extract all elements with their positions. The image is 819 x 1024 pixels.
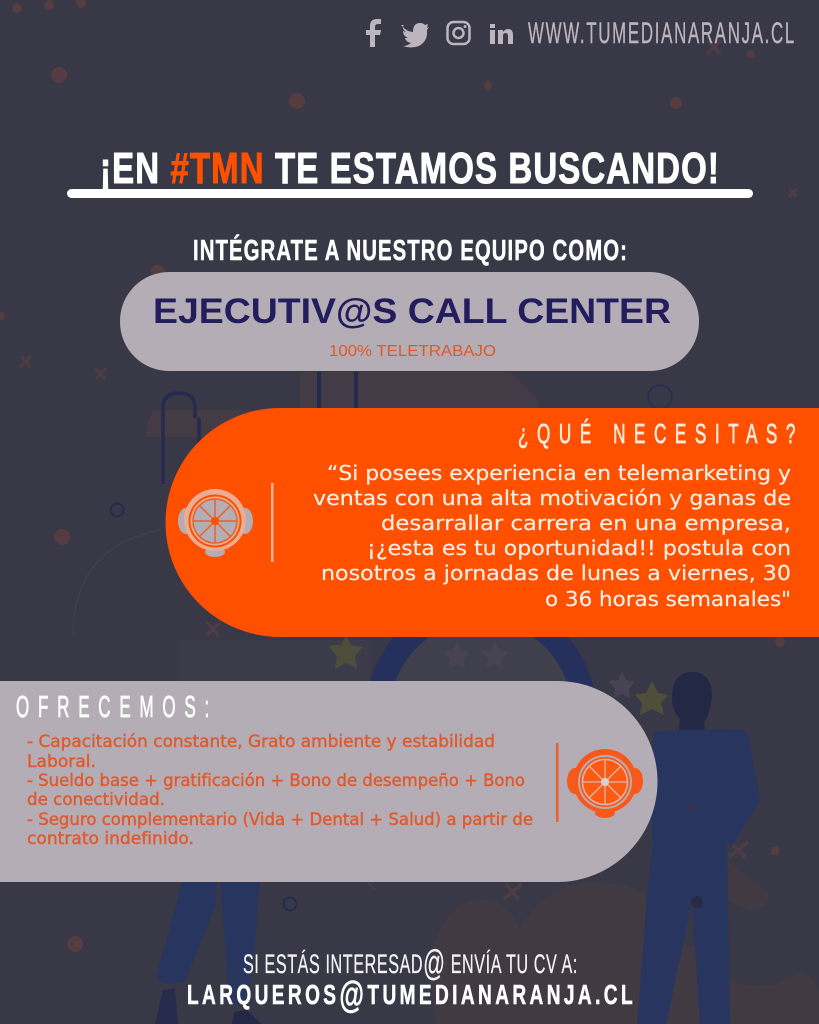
background clock and stars	[180, 609, 668, 815]
icon: linkedin	[490, 24, 513, 44]
social icons	[366, 19, 513, 48]
logo: orange with headset	[567, 749, 643, 818]
body text: ¡¿esta es tu oportunidad!! postula con	[367, 536, 791, 560]
icon: instagram	[448, 22, 470, 44]
body text: desarrallar carrera en una empresa,	[381, 511, 791, 535]
call to action: ENVÍA TU CV A:	[446, 949, 578, 979]
body text	[313, 461, 791, 611]
divider	[556, 743, 558, 822]
benefits list	[27, 732, 533, 848]
benefits list: - Seguro complementario (Vida + Dental + Salud) a partir de	[27, 810, 533, 829]
panel: qué necesitas	[166, 408, 819, 637]
heading: OFRECEMOS:	[16, 689, 218, 724]
job modality: 100% TELETRABAJO	[329, 343, 496, 360]
man spots	[687, 805, 695, 813]
call to action: SI ESTÁS INTERESAD	[243, 949, 545, 979]
subtitle: INTÉGRATE A NUESTRO EQUIPO COMO:	[193, 233, 628, 267]
body text: nosotros a jornadas de lunes a viernes, 30	[321, 561, 791, 585]
background desk and clip	[73, 372, 672, 910]
background woman	[155, 882, 262, 1024]
icon: facebook	[366, 19, 381, 47]
background blobs	[431, 860, 819, 1024]
benefits list: contrato indefinido.	[27, 829, 194, 848]
benefits list: - Capacitación constante, Grato ambiente y estabilidad	[27, 732, 495, 751]
panel: ofrecemos	[0, 681, 658, 882]
contact email: TUMEDIANARANJA.CL	[367, 979, 636, 1010]
body text: o 36 horas semanales"	[545, 587, 791, 611]
call to action: @	[423, 942, 446, 983]
benefits list: - Sueldo base + gratificación + Bono de desempeño + Bono	[27, 771, 525, 790]
background man	[637, 672, 760, 1024]
title underline	[67, 189, 753, 198]
body text: ventas con una alta motivación y ganas de	[313, 486, 791, 510]
background crosses	[20, 40, 797, 899]
divider	[271, 483, 274, 562]
benefits list: de conectividad.	[27, 790, 165, 809]
contact email: @	[339, 974, 367, 1015]
body text: “Si posees experiencia en telemarketing y	[327, 461, 791, 485]
logo: orange with headset	[178, 489, 253, 557]
icon: twitter	[401, 23, 429, 48]
job title: EJECUTIV@S CALL CENTER	[153, 292, 671, 331]
panel: job title	[120, 272, 699, 371]
benefits list: Laboral.	[27, 752, 96, 771]
contact email: LARQUEROS	[187, 979, 411, 1010]
